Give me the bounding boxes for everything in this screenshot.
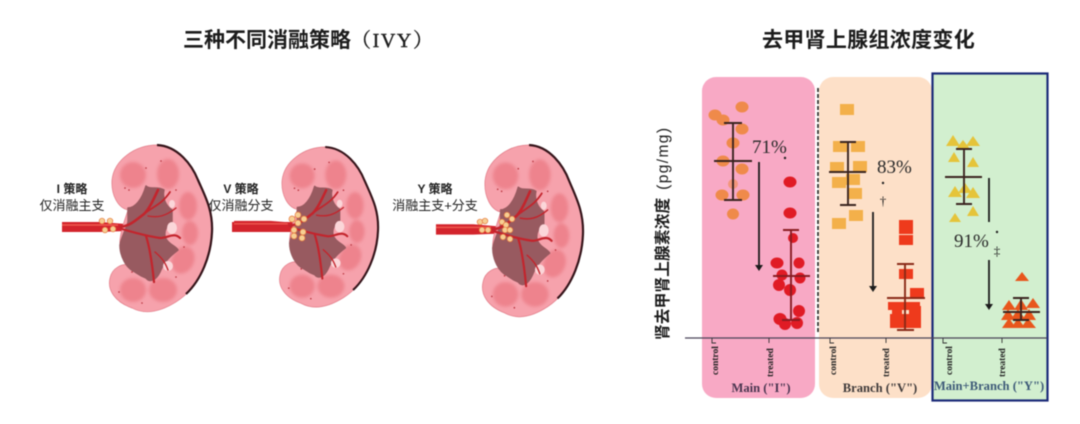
arrow xyxy=(869,212,877,292)
kidney: V strategy xyxy=(232,147,378,307)
panel: Main+Branch Y xyxy=(933,74,1047,400)
label: I strategy: 仅消融主支 xyxy=(39,198,105,213)
treated points xyxy=(1001,272,1040,328)
label: Y strategy: Y 策略 xyxy=(417,181,453,196)
x tick labels xyxy=(711,338,1008,377)
percentage: 83% xyxy=(877,157,912,178)
panel: Main I xyxy=(702,77,815,398)
control points xyxy=(830,104,867,229)
treated points xyxy=(888,220,924,328)
highlight frame xyxy=(932,74,1048,400)
x tick labels: control xyxy=(829,346,839,375)
x tick labels: treated xyxy=(998,347,1008,377)
title: IVY strategies: 三种不同消融策略（IVY） xyxy=(183,29,435,52)
label: I strategy: I 策略 xyxy=(57,181,87,196)
treated points xyxy=(770,176,806,330)
y axis label: 肾去甲肾上腺素浓度(pg/mg) xyxy=(653,127,672,340)
label: Y strategy: 消融主支+分支 xyxy=(392,198,478,213)
x tick labels: control xyxy=(945,346,955,375)
x tick labels: treated xyxy=(882,347,892,377)
label: V strategy xyxy=(208,181,274,213)
kidney: Y strategy xyxy=(436,145,583,317)
group label: Main ("I") xyxy=(731,381,791,395)
x axis xyxy=(685,337,1047,339)
title: norepinephrine change: 去甲肾上腺组浓度变化 xyxy=(762,28,975,52)
control points xyxy=(708,102,750,220)
x tick labels: treated xyxy=(766,347,776,377)
arrow xyxy=(985,178,993,310)
label: Y strategy xyxy=(392,181,478,213)
panel: Main+Branch Y: ‡ xyxy=(994,243,1001,258)
percentage: 91% xyxy=(954,231,989,252)
dashed divider xyxy=(817,88,819,332)
panel: Branch V xyxy=(819,77,932,398)
label: V strategy: 仅消融分支 xyxy=(208,198,274,213)
control points xyxy=(946,135,980,222)
x tick labels: control xyxy=(711,346,721,375)
label: V strategy: V 策略 xyxy=(223,181,259,196)
panel: Branch V: † xyxy=(880,193,887,208)
label: I strategy xyxy=(39,181,105,213)
percentage: 71% xyxy=(752,137,787,158)
arrow xyxy=(755,162,763,271)
group label: Main+Branch ("Y") xyxy=(934,379,1044,393)
kidney: I strategy xyxy=(62,145,212,312)
group label: Branch ("V") xyxy=(843,381,917,395)
